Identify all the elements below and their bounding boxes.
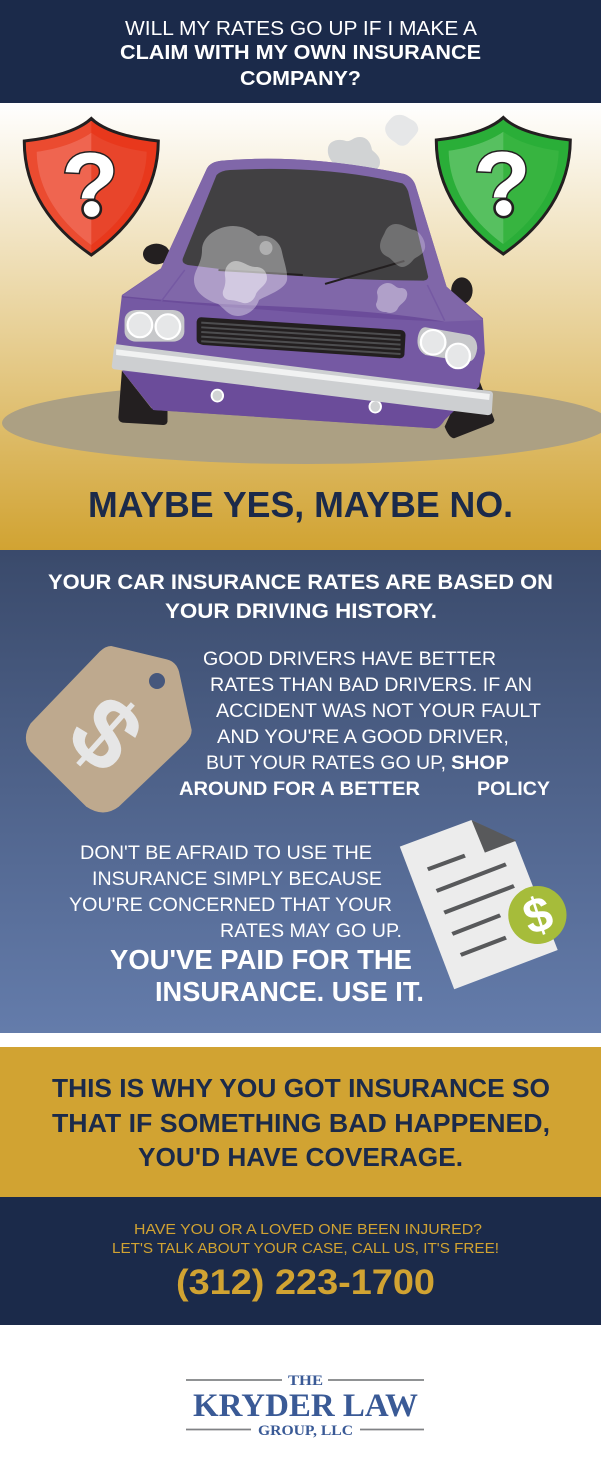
text: good drivers [179,649,550,800]
icon: wrecked purple car [112,159,494,438]
text: good drivers: BUT YOUR RATES GO UP, [206,753,446,774]
icon: red shield [24,118,158,255]
heading: maybe yes, maybe no: MAYBE YES, MAYBE NO. [88,484,513,525]
text: good drivers: ACCIDENT WAS NOT YOUR FAULT [216,701,541,722]
icon: green question mark: ? [473,132,531,237]
panel: driving history [0,550,601,1033]
hood crease [122,296,445,322]
car body [116,159,485,428]
panel: hero illustration [0,103,601,550]
lower body [123,372,471,428]
icon: price tag [26,646,192,812]
text: why you got insurance [52,1073,550,1172]
text: good drivers: AND YOU'RE A GOOD DRIVER, [217,727,509,748]
text: good drivers: SHOP [451,753,509,774]
text: call prompt: LET'S TALK ABOUT YOUR CASE, CALL US, IT'S FREE! [112,1240,499,1257]
callout: use it: YOU'VE PAID FOR THE [110,944,412,975]
hood and roof highlight [122,159,483,322]
bolts [212,390,381,413]
icon: green shield [436,118,570,254]
logo: Kryder Law Group [186,1373,424,1439]
panel: header [0,0,601,103]
top smoke puffs [328,115,418,172]
logo: Kryder Law Group: GROUP, LLC [258,1423,353,1439]
phone number: (312) 223-1700 [176,1263,435,1302]
text: good drivers: GOOD DRIVERS HAVE BETTER [203,649,496,670]
bumper [112,344,493,415]
logo: Kryder Law Group: THE [288,1373,323,1389]
logo: Kryder Law Group: KRYDER LAW [193,1388,418,1424]
title [120,18,481,90]
grille [197,317,406,358]
smoke on windshield and hood [194,224,425,316]
icon: policy document: $ [517,886,559,946]
panel: call to action [0,1197,601,1325]
title: COMPANY? [240,68,361,90]
text: good drivers: POLICY [477,779,550,800]
heading: driving history: YOUR DRIVING HISTORY. [165,600,437,623]
title: WILL MY RATES GO UP IF I MAKE A [125,18,478,40]
text: don't be afraid: INSURANCE SIMPLY BECAUSE [92,869,382,890]
callout: use it [110,944,424,1007]
text: don't be afraid: YOU'RE CONCERNED THAT YOUR [69,895,392,916]
heading: driving history: YOUR CAR INSURANCE RATES ARE BASED ON [48,571,553,594]
text: don't be afraid: RATES MAY GO UP. [220,921,402,942]
heading: driving history [48,571,553,623]
text: why you got insurance: YOU'D HAVE COVERAGE. [138,1142,463,1172]
icon: red question mark: ? [61,133,119,238]
right headlights [417,327,477,368]
icon: policy document [400,820,567,989]
text: call prompt: HAVE YOU OR A LOVED ONE BEEN INJURED? [134,1221,482,1238]
icon: price tag: $ [48,674,164,794]
left headlights [125,310,184,342]
wheels [118,371,494,438]
text: call prompt [112,1221,499,1257]
mirrors [143,244,473,304]
text: why you got insurance: THIS IS WHY YOU GOT INSURANCE SO [52,1073,550,1103]
title: CLAIM WITH MY OWN INSURANCE [120,42,481,64]
text: good drivers: AROUND FOR A BETTER [179,779,420,800]
windshield [183,169,428,281]
text: good drivers: RATES THAN BAD DRIVERS. IF AN [210,675,532,696]
text: don't be afraid [69,843,402,942]
hood seams [161,270,445,321]
text: why you got insurance: THAT IF SOMETHING BAD HAPPENED, [52,1108,550,1138]
ground shadow [2,382,601,464]
panel: gold statement [0,1047,601,1197]
callout: use it: INSURANCE. USE IT. [155,976,424,1007]
wipers [218,261,404,284]
text: don't be afraid: DON'T BE AFRAID TO USE THE [80,843,372,864]
